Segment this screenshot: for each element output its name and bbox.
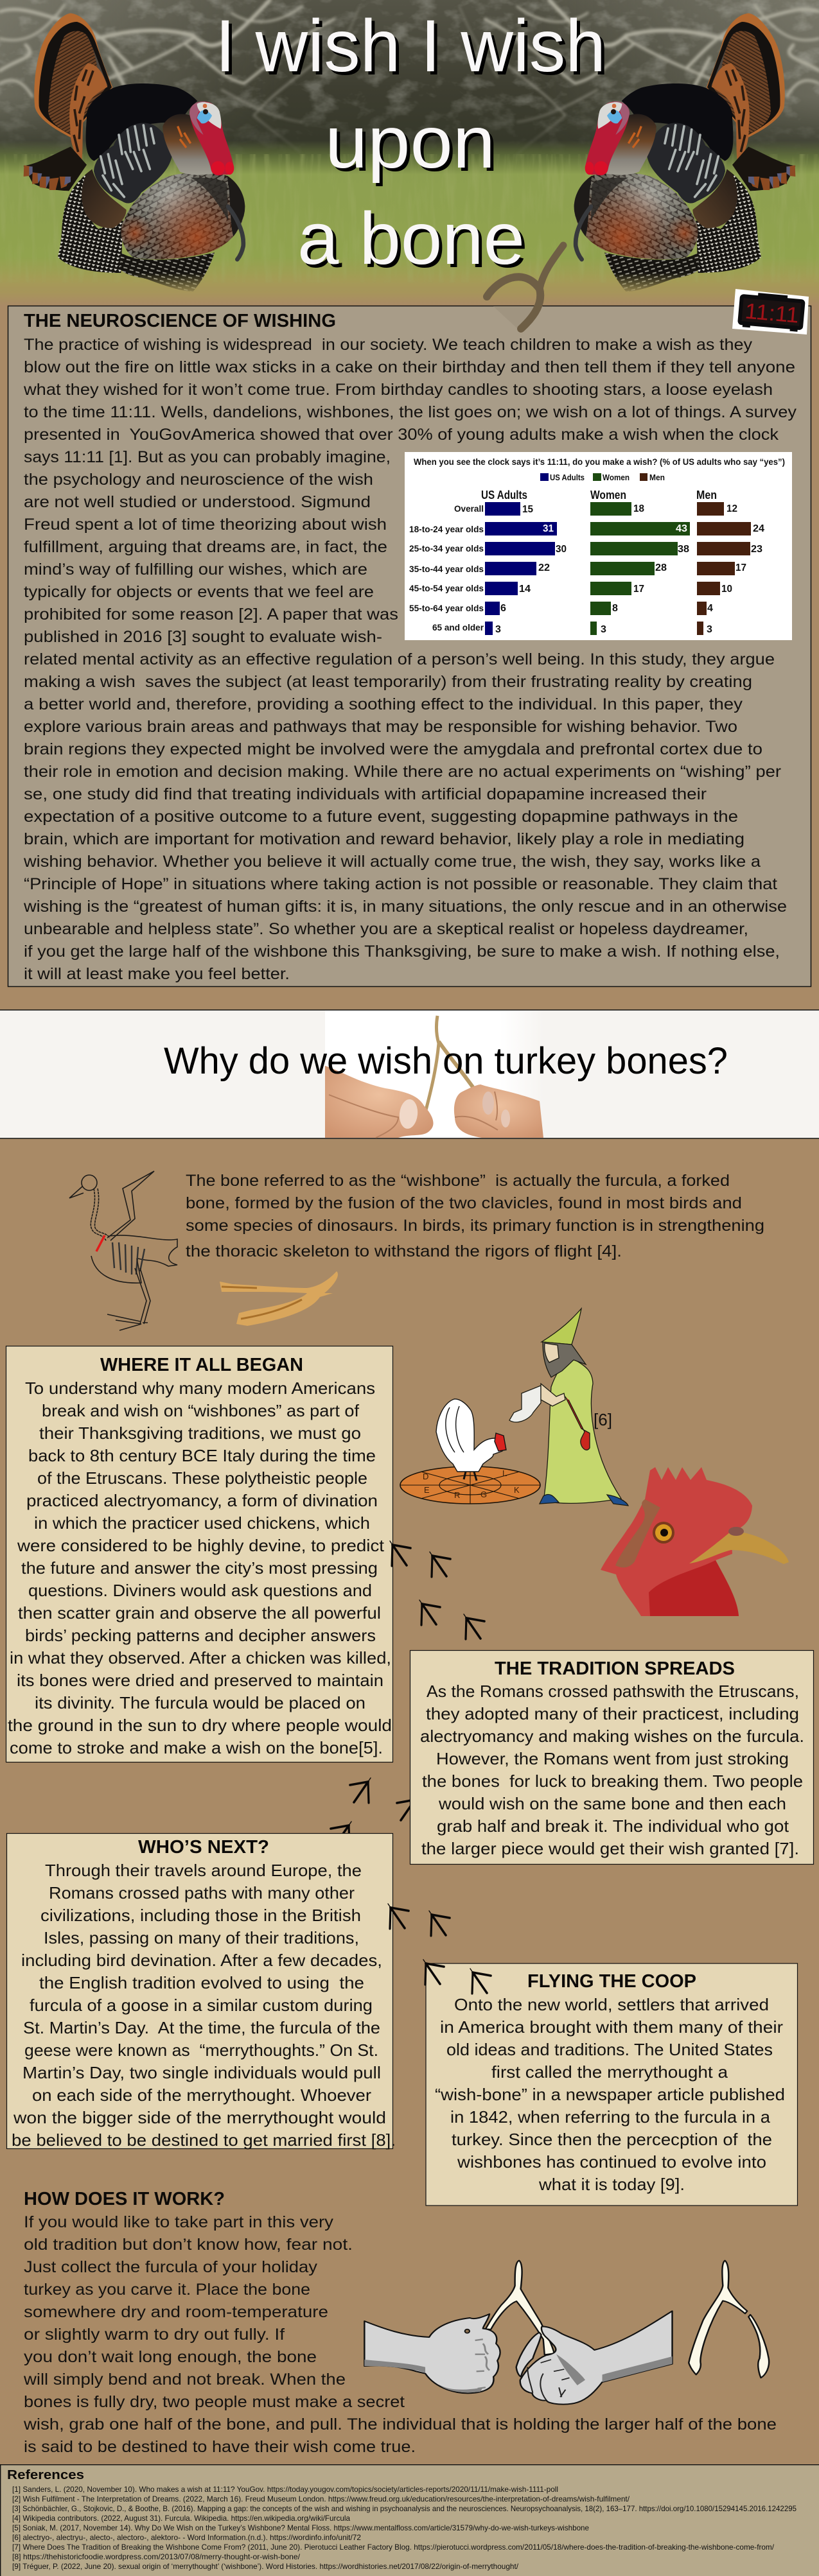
- row labels: 65 and older: [432, 622, 484, 632]
- icon: bird skeleton: [69, 1171, 177, 1330]
- body text: However, the Romans went from just stroking: [436, 1749, 789, 1768]
- title: [215, 5, 609, 283]
- title: I wish I wish: [218, 8, 609, 91]
- bar values: 23: [751, 544, 762, 555]
- bar values: 6: [500, 603, 506, 614]
- body text: birds’ pecking patterns and decipher answers: [25, 1626, 376, 1645]
- heading: Why do we wish on turkey bones?: [164, 1040, 728, 1082]
- body text: break and wish on “wishbones” as part of: [42, 1401, 360, 1420]
- body text: back to 8th century BCE Italy during the time: [28, 1446, 376, 1465]
- body text: bones is fully dry, two people must make a secret: [24, 2393, 405, 2411]
- body text: won the bigger side of the merrythought would: [13, 2108, 386, 2127]
- title: I wish I wish: [215, 5, 606, 87]
- bar values: 31: [543, 523, 554, 534]
- body text: expectation of a positive outcome to a future event, suggesting dopapmine pathways in the: [24, 808, 738, 826]
- bar values: 12: [727, 503, 737, 514]
- body text: [420, 1682, 804, 1858]
- legend: Men: [649, 473, 665, 482]
- body text: alectryomancy and making wishes on the furcula.: [420, 1727, 804, 1746]
- body text: making a wish saves the subject (at least temporarily) from their frustrating reality by creating: [24, 673, 752, 691]
- US adults bars: [485, 502, 557, 635]
- text: the bone referred to: the thoracic skeleton to withstand the rigors of flight [4].: [186, 1242, 622, 1260]
- index finger: [516, 2333, 541, 2377]
- body text: in what they observed. After a chicken was killed,: [10, 1648, 391, 1667]
- bar values: 17: [735, 562, 746, 573]
- body text: As the Romans crossed pathswith the Etruscans,: [427, 1682, 799, 1701]
- illustration: divination disc: E: [424, 1485, 430, 1495]
- body text: se, one study did find that treating individuals with artificial dopapamine increased their: [24, 785, 707, 803]
- bar values: 30: [556, 544, 567, 555]
- body text: will simply bend and not break. When the: [23, 2371, 346, 2389]
- body text: or slightly warm to dry out fully. If: [24, 2326, 285, 2344]
- citation: [6]: [594, 1410, 612, 1429]
- illustration: divination disc: G: [480, 1490, 487, 1499]
- body text: Just collect the furcula of your holiday: [24, 2258, 318, 2276]
- title: upon: [328, 105, 498, 187]
- body text: including bird devination. After a few decades,: [21, 1951, 382, 1970]
- body text: civilizations, including those in the British: [40, 1906, 361, 1925]
- body text: somewhere dry and room-temperature: [24, 2303, 328, 2321]
- heading: WHO’S NEXT?: [138, 1837, 269, 1858]
- panel: references: [0, 2464, 819, 2576]
- body text: The practice of wishing is widespread in our society. We teach children to make a wish as they: [24, 336, 753, 354]
- body text: questions. Diviners would ask questions and: [28, 1581, 372, 1600]
- legend: [540, 473, 665, 482]
- speckled lower back: [58, 173, 123, 273]
- body text: it will at least make you feel better.: [24, 965, 290, 983]
- bar values: 3: [707, 624, 712, 635]
- body text: their Thanksgiving traditions, we must go: [39, 1423, 361, 1443]
- body text: they adopted many of their practicest, including: [426, 1704, 799, 1723]
- body text: the English tradition evolved to using the: [39, 1973, 364, 1992]
- column headers: [481, 489, 717, 501]
- bar values: [495, 503, 764, 635]
- bar values: 28: [655, 562, 667, 573]
- panel: who's next: [6, 1834, 396, 2150]
- black mantle: [86, 83, 197, 161]
- reference list: [1] Sanders, L. (2020, November 10). Who makes a wish at 11:11? YouGov. https://today.yougov.com/topics/society/articles-reports/2020/11/11/make-wish-1111-poll: [12, 2485, 558, 2494]
- reference list: [3] Schönbächler, G., Stojkovic, D., & Boothe, B. (2016). Mapping a gap: the concepts of the wish and wishing in psychoanalysis and the neurosciences. Neuropsychoanalysis, 18(2), 163–177. https://doi.org/10.1080/15294145.2016.1242295: [12, 2504, 797, 2513]
- body text: mind’s way of fulfilling our wishes, which are: [24, 561, 367, 579]
- body text: a better world and, therefore, providing a soothing effect to the individual. In this paper, they: [24, 695, 743, 713]
- bar values: 15: [522, 504, 533, 515]
- body text: the psychology and neuroscience of the wish: [24, 471, 373, 489]
- body text: to the time 11:11. Wells, dandelions, wishbones, the list goes on; we wish on a lot of things. A survey: [24, 403, 797, 421]
- heading: FLYING THE COOP: [527, 1971, 696, 1992]
- legs: [120, 252, 215, 292]
- body text: geese were known as “merrythoughts.” On St.: [24, 2041, 378, 2060]
- column headers: Men: [696, 489, 717, 501]
- body text: typically for objects or events that we feel are: [24, 583, 374, 601]
- wishbone over panel: [487, 245, 563, 331]
- body text: wishbones has continued to evolve into: [457, 2152, 766, 2171]
- breast feathers: [121, 173, 245, 259]
- chicken tracks crossing boxes: [388, 1904, 491, 1994]
- panel: why do we wish banner: [0, 1010, 819, 1138]
- body text: the ground in the sun to dry where people would: [8, 1716, 392, 1735]
- body text: [23, 2213, 777, 2456]
- body text: were considered to be highly devine, to predict: [17, 1536, 385, 1555]
- body text: If you would like to take part in this very: [24, 2213, 334, 2231]
- panel: flying the coop: [426, 1963, 798, 2206]
- body text: its divinity. The furcula would be placed on: [35, 1693, 365, 1712]
- body text: furcula of a goose in a similar custom during: [30, 1996, 373, 2015]
- bar values: 43: [676, 523, 687, 534]
- illustration: divination disc: [400, 1466, 540, 1504]
- reference list: [4] Wikipedia contributors. (2022, August 31). Furcula. Wikipedia. https://en.wikipedia.org/wiki/Furcula: [12, 2514, 350, 2523]
- illustration: divination disc: R: [454, 1490, 460, 1500]
- body text: “Principle of Hope” in situations where taking action is not possible or reasonable. They claim that: [24, 875, 777, 893]
- photo: rooster head: [601, 1467, 789, 1616]
- title: a bone: [301, 201, 528, 283]
- legend: Women: [603, 473, 630, 482]
- text: the bone referred to: The bone referred to as the “wishbone” is actually the furcula, a forked: [186, 1172, 730, 1190]
- reference list: [9] Tréguer, P. (2022, June 20). sexual origin of ‘merrythought’ (‘wishbone’). Word Histories. https://wordhistories.net/2017/08/22/origin-of-merrythought/: [12, 2562, 519, 2571]
- body text: [435, 1995, 785, 2194]
- body text: the larger piece would get their wish granted [7].: [421, 1839, 799, 1858]
- wishbone held: [486, 2261, 554, 2354]
- illustration: divination disc: L: [502, 1468, 507, 1478]
- body text: wish, grab one half of the bone, and pull. The individual that is holding the larger half of the bone: [23, 2415, 777, 2433]
- chicken tracks trail: [331, 1541, 484, 1847]
- body text: related mental activity as an effective regulation of a person’s well being. In this study, they argue: [24, 650, 775, 668]
- left hand: [364, 2314, 500, 2393]
- beard: [228, 207, 243, 259]
- women bars: [590, 502, 690, 635]
- body text: fulfillment, arguing that dreams are, in fact, the: [24, 538, 387, 556]
- body text: presented in YouGovAmerica showed that over 30% of young adults make a wish when the clock: [24, 426, 779, 444]
- body text: prohibited for some reason [2]. A paper that was: [24, 605, 398, 623]
- icon: digital clock 11:11: 11:11: [744, 299, 800, 328]
- row labels: 55-to-64 year olds: [409, 603, 484, 613]
- body text: Romans crossed paths with many other: [49, 1883, 355, 1902]
- body text: brain, which are important for motivation and reward behavior, likely play a role in mediating: [24, 830, 744, 848]
- bar values: 24: [753, 523, 764, 534]
- icon: digital clock 11:11: [732, 289, 809, 335]
- bar values: 18: [633, 503, 644, 514]
- photo: hands pulling a wishbone: [325, 1016, 543, 1138]
- men bars: [697, 502, 751, 635]
- row labels: 35-to-44 year olds: [409, 564, 484, 574]
- body text: come to stroke and make a wish on the bone[5].: [10, 1738, 383, 1757]
- bar values: 8: [612, 603, 618, 614]
- tail fan: [34, 13, 112, 137]
- row labels: Overall: [454, 503, 484, 514]
- silver wing feathers: [94, 123, 172, 204]
- heading: THE NEUROSCIENCE OF WISHING: [24, 311, 336, 331]
- title: upon: [325, 101, 495, 184]
- body text: the future and answer the city’s most pressing: [21, 1558, 378, 1578]
- illustration: white rooster: [436, 1399, 506, 1481]
- bar values: 3: [495, 624, 501, 635]
- body text: is said to be destined to have their wish come true.: [24, 2438, 416, 2456]
- text: the bone referred to: some species of dinosaurs. In birds, its primary function is in strengthening: [186, 1217, 764, 1235]
- turkey left: [24, 13, 245, 292]
- body text: what it is today [9].: [538, 2175, 685, 2194]
- right hand: [520, 2311, 673, 2405]
- body text: Martin’s Day, two single individuals would pull: [22, 2063, 381, 2082]
- body text: if you get the large half of the wishbone this Thanksgiving, be sure to make a wish. If nothing else,: [24, 943, 780, 961]
- body text: unbearable and helpless state”. So whether you are a skeptical realist or hopeless daydreamer,: [24, 920, 748, 938]
- illustration: hands pulling wishbone: [364, 2261, 673, 2405]
- body text: “wish-bone” in a newspaper article published: [435, 2085, 785, 2104]
- column headers: US Adults: [481, 489, 527, 501]
- panel: the tradition spreads: [410, 1650, 813, 1865]
- row labels: 45-to-54 year olds: [409, 583, 484, 593]
- text: the bone referred to: [186, 1172, 764, 1260]
- body text: its bones were dried and preserved to maintain: [17, 1671, 383, 1690]
- body text: published in 2016 [3] sought to evaluate wish-: [24, 628, 382, 646]
- panel: neuroscience of wishing: [8, 245, 811, 986]
- body text: practiced alectryomancy, a form of divination: [26, 1491, 378, 1510]
- illustration: divination disc: D: [423, 1472, 428, 1481]
- body text: [12, 1861, 396, 2150]
- body text: would wish on the same bone and then each: [438, 1794, 786, 1813]
- column headers: Women: [590, 489, 626, 501]
- neck: [163, 114, 213, 175]
- body text: wishing is the “greatest of human gifts: it is, in many situations, the only rescue and in an otherwise: [23, 898, 787, 916]
- body text: be believed to be destined to get married first [8].: [12, 2130, 396, 2150]
- body text: blow out the fire on little wax sticks in a cake on their birthday and then tell them if they tell anyone: [24, 358, 795, 376]
- bar values: 14: [519, 584, 531, 595]
- hero grass foreground fade: [0, 273, 819, 306]
- reference list: [5] Soniak, M. (2017, November 14). Why Do We Wish on the Turkey’s Wishbone? Mental Floss. https://www.mentalfloss.com/article/31579/why-do-we-wish-turkeys-wishbone: [12, 2523, 589, 2532]
- body text: what they wished for it won’t come true. From birthday candles to shooting stars, a loose eyelash: [23, 381, 773, 399]
- illustration: wizard: [509, 1309, 628, 1506]
- legend: US Adults: [550, 473, 585, 482]
- illustration: divination disc: K: [514, 1485, 520, 1495]
- bar values: 4: [707, 603, 713, 614]
- bar chart: make a wish at 11:11: [405, 452, 792, 640]
- title: a bone: [297, 198, 525, 280]
- body text: says 11:11 [1]. But as you can probably imagine,: [24, 448, 391, 466]
- body text: their role in emotion and decision making. While there are no actual experiments on “wishing” per: [24, 763, 781, 781]
- row labels: 18-to-24 year olds: [409, 524, 484, 534]
- rear fur and tail tips: [24, 146, 87, 191]
- body text: wishing behavior. Whether you believe it will actually come true, the wish, they say, works like a: [23, 853, 761, 871]
- body text: you don’t wait long enough, the bone: [24, 2348, 317, 2366]
- heading: THE TRADITION SPREADS: [495, 1658, 735, 1679]
- body text: Through their travels around Europe, the: [45, 1861, 362, 1880]
- body text: in America brought with them many of their: [440, 2017, 783, 2037]
- body text: turkey. Since then the percecption of the: [452, 2130, 772, 2149]
- body text: old tradition but don’t know how, fear not.: [24, 2236, 353, 2254]
- chart title: When you see the clock says it’s 11:11, do you make a wish? (% of US adults who say “yes”): [414, 457, 785, 467]
- bar values: 10: [721, 584, 732, 595]
- body text: St. Martin’s Day. At the time, the furcula of the: [23, 2018, 380, 2037]
- body text: on each side of the merrythought. Whoever: [32, 2085, 371, 2105]
- body text: first called the merrythought a: [491, 2062, 728, 2082]
- body text: the bones for luck to breaking them. Two people: [422, 1771, 803, 1791]
- hero photo background: trees and grass: [0, 0, 819, 306]
- bar values: 17: [633, 584, 644, 595]
- bar values: 38: [678, 544, 689, 555]
- body text: [8, 1379, 392, 1757]
- brown wing: [82, 169, 127, 228]
- turkey right: [574, 13, 795, 292]
- head: [189, 101, 234, 175]
- heading: WHERE IT ALL BEGAN: [100, 1355, 303, 1375]
- row labels: 25-to-34 year olds: [409, 543, 484, 553]
- heading: HOW DOES IT WORK?: [24, 2189, 225, 2209]
- body text: brain regions they expected might be involved were the amygdala and prefrontal cortex due to: [24, 740, 762, 758]
- body text: of the Etruscans. These polytheistic people: [37, 1468, 367, 1488]
- section: how does it work: [23, 2189, 777, 2456]
- reference list: [12, 2485, 797, 2571]
- body text: Freud spent a lot of time theorizing about wish: [24, 516, 387, 534]
- body text: turkey as you carve it. Place the bone: [24, 2281, 310, 2299]
- body text: in which the practicer used chickens, which: [34, 1513, 370, 1533]
- reference list: [8] https://thehistoricfoodie.wordpress.com/2013/07/08/merry-thought-or-wish-bone/: [12, 2552, 301, 2561]
- reference list: [2] Wish Fulfilment - The Interpretation of Dreams. (2022, March 16). Freud Museum London. https://www.freud.org.uk/education/resources/the-interpretation-of-dreams/wish-fulfilment/: [12, 2494, 630, 2503]
- body text: in 1842, when referring to the furcula in a: [450, 2107, 771, 2127]
- body text: Isles, passing on many of their traditions,: [44, 1928, 359, 1947]
- body text: [23, 336, 797, 983]
- body text: then scatter grain and observe the all powerful: [18, 1603, 381, 1623]
- body text: explore various brain areas and pathways that may be responsible for wishing behavior. Two: [24, 718, 737, 736]
- body text: old ideas and traditions. The United States: [446, 2040, 773, 2059]
- body text: To understand why many modern Americans: [25, 1379, 375, 1398]
- reference list: [7] Where Does The Tradition of Breaking the Wishbone Come From? (2011, June 20). Pierotucci Leather Factory Blog. https://pierotucci.wordpress.com/2011/05/18/where-does-the-tradition-of-breaking-the-wishbone-come-from/: [12, 2543, 775, 2552]
- body text: Onto the new world, settlers that arrived: [454, 1995, 769, 2014]
- reference list: [6] alectryo-, alectryu-, alecto-, alectoro-, alektoro- - Word Information.(n.d.). https://wordinfo.info/unit/72: [12, 2533, 361, 2542]
- heading: References: [7, 2468, 84, 2482]
- panel: where it all began: [6, 1346, 393, 1762]
- bar values: 3: [601, 624, 606, 635]
- body text: grab half and break it. The individual who got: [437, 1816, 789, 1836]
- text: the bone referred to: bone, formed by the fusion of the two clavicles, found in most birds and: [186, 1194, 742, 1212]
- bar values: 22: [538, 562, 550, 573]
- icon: furcula bone: [220, 1271, 338, 1326]
- body text: are not well studied or understood. Sigmund: [24, 493, 371, 511]
- row labels: [409, 503, 484, 632]
- icon: broken wishbone: [689, 2261, 769, 2378]
